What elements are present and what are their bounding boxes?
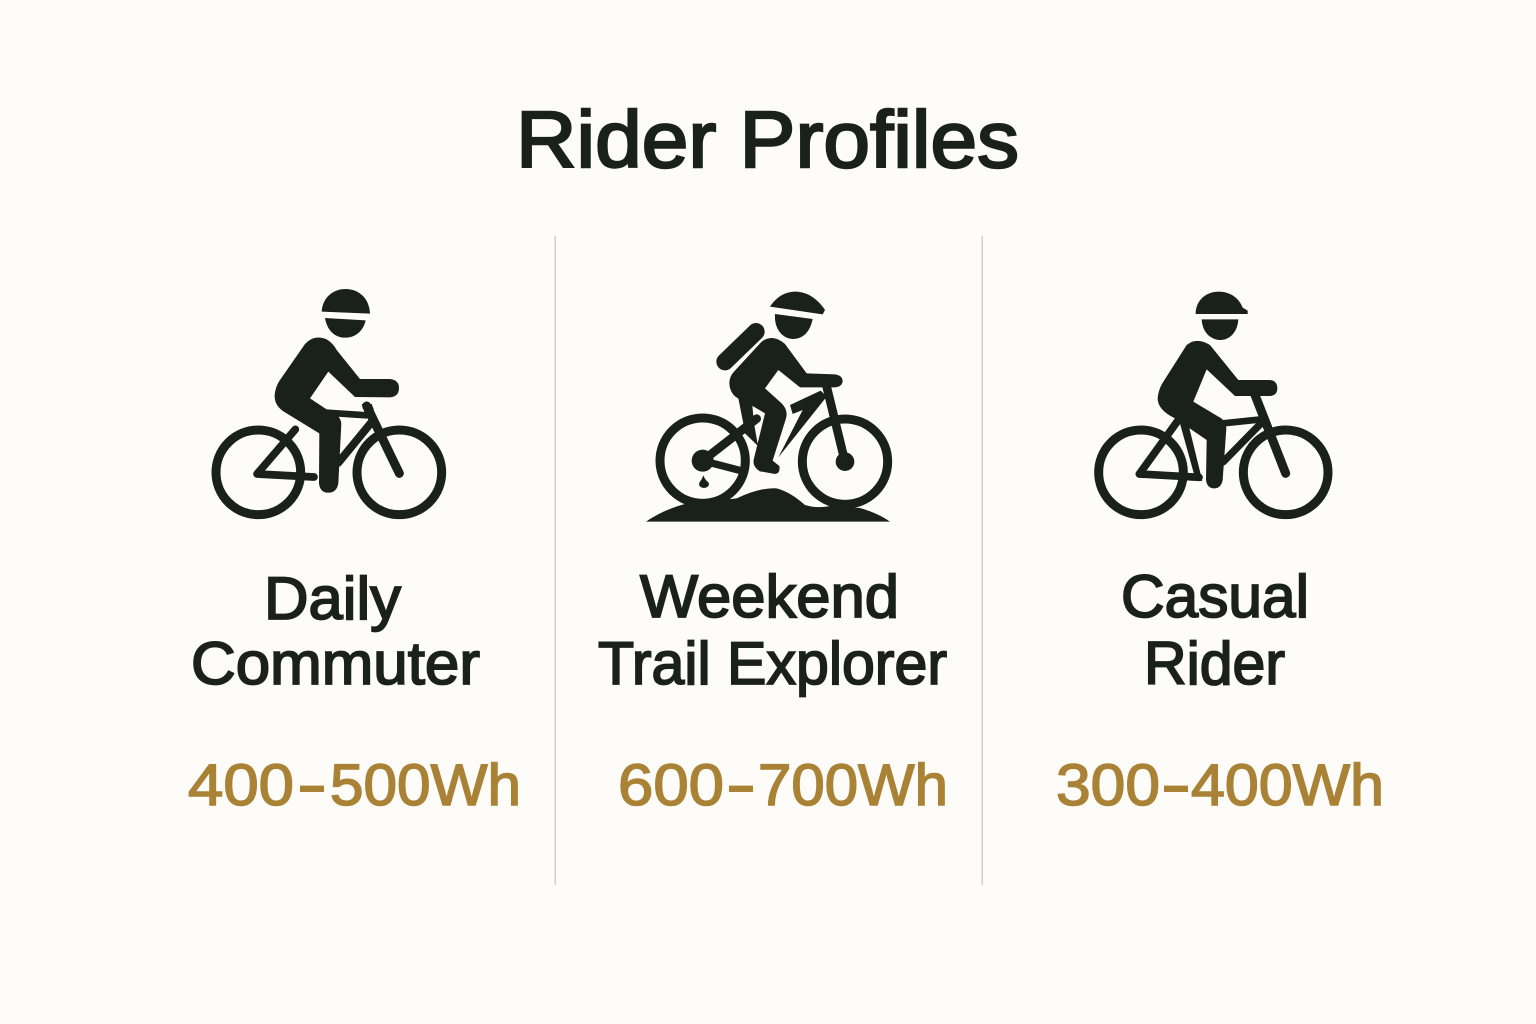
title: Rider Profiles [516,95,1019,184]
label: Casual Rider [1121,563,1309,697]
value: 600–700Wh: 600 [618,753,724,818]
label: Daily Commuter: Commuter [191,630,480,697]
label: Weekend Trail Explorer [598,563,947,697]
icon: trail cyclist on hill [646,292,890,522]
icon: commuter cyclist [216,289,442,515]
panel: daily commuter [188,289,521,818]
label: Weekend Trail Explorer: Weekend [640,563,899,630]
icon: casual cyclist [1099,292,1328,515]
label: Casual Rider: Casual [1121,563,1309,630]
label: Daily Commuter [191,565,480,697]
value: 400–500Wh: 500Wh [330,753,521,818]
panel: casual rider [1056,292,1384,818]
label: Daily Commuter: Daily [264,565,401,632]
value: 400–500Wh: – [302,765,322,806]
value: 300–400Wh: 400Wh [1191,753,1384,818]
value: 400–500Wh: 400 [188,753,294,818]
panel: weekend trail explorer [598,292,948,818]
label: Casual Rider: Rider [1144,630,1285,697]
value: 300–400Wh: – [1166,765,1186,806]
value: 600–700Wh: – [731,765,751,806]
value: 300–400Wh: 300 [1056,753,1160,818]
value: 600–700Wh: 700Wh [758,753,948,818]
label: Weekend Trail Explorer: Trail Explorer [598,630,947,697]
